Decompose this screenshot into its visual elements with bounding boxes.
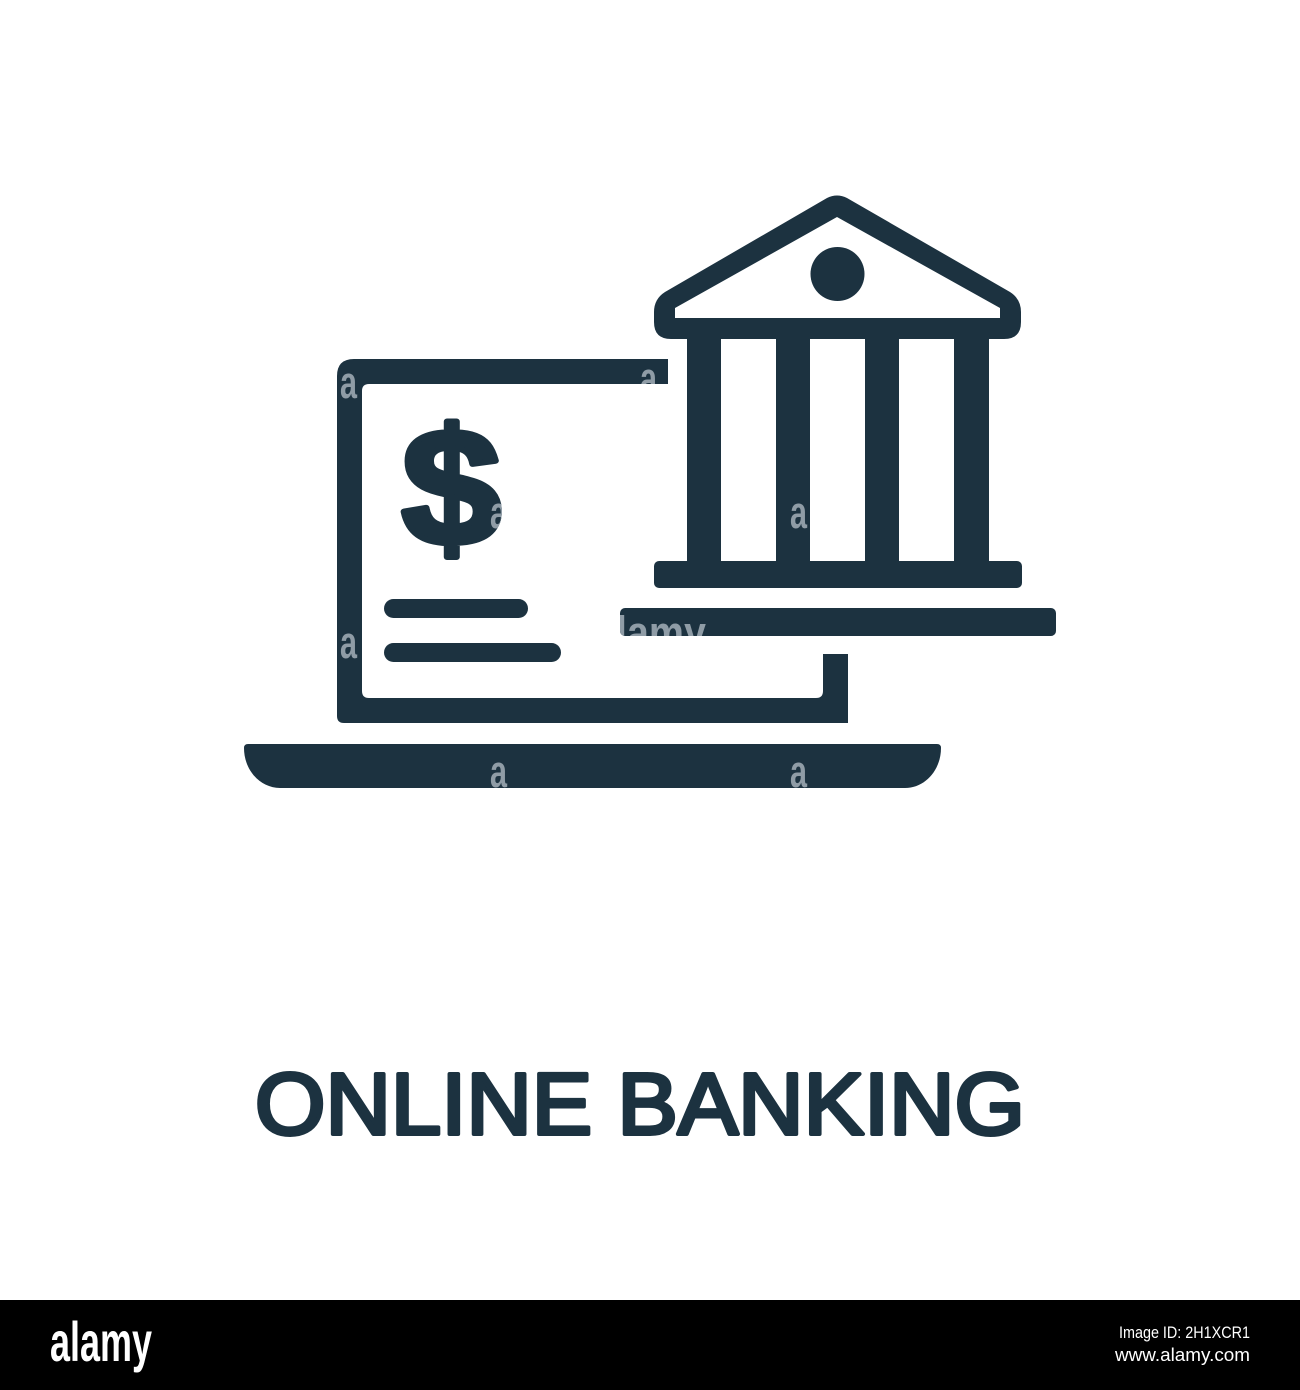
icon: bank building	[620, 196, 1056, 636]
watermark fragments over icon: lamy	[616, 607, 706, 658]
watermark fragments over icon: a	[640, 354, 657, 405]
watermark fragments over icon: a	[790, 747, 807, 798]
footer logo: alamy	[50, 1310, 152, 1373]
icon: laptop base	[244, 744, 941, 788]
footer bar	[0, 1300, 1300, 1390]
watermark fragments over icon: a	[340, 618, 357, 669]
watermark fragments over icon: a	[790, 488, 807, 539]
watermark fragments over icon: a	[340, 358, 357, 409]
bank roof medallion	[810, 247, 864, 301]
bank lower step	[620, 608, 1056, 636]
watermark fragments over icon	[340, 354, 807, 798]
bank roof	[654, 196, 1021, 339]
icon: laptop screen frame	[337, 359, 848, 723]
bank columns	[687, 335, 989, 565]
image id: Image ID: 2H1XCR1	[1119, 1323, 1250, 1342]
bank upper step	[654, 561, 1022, 588]
watermark fragments over icon: a	[490, 488, 507, 539]
title: ONLINE BANKING	[255, 1056, 1025, 1153]
watermark fragments over icon: a	[490, 747, 507, 798]
website: www.alamy.com	[1114, 1345, 1250, 1365]
icon: screen text lines	[384, 599, 561, 662]
icon: online banking	[244, 196, 1056, 788]
icon: dollar sign: $	[402, 395, 501, 580]
